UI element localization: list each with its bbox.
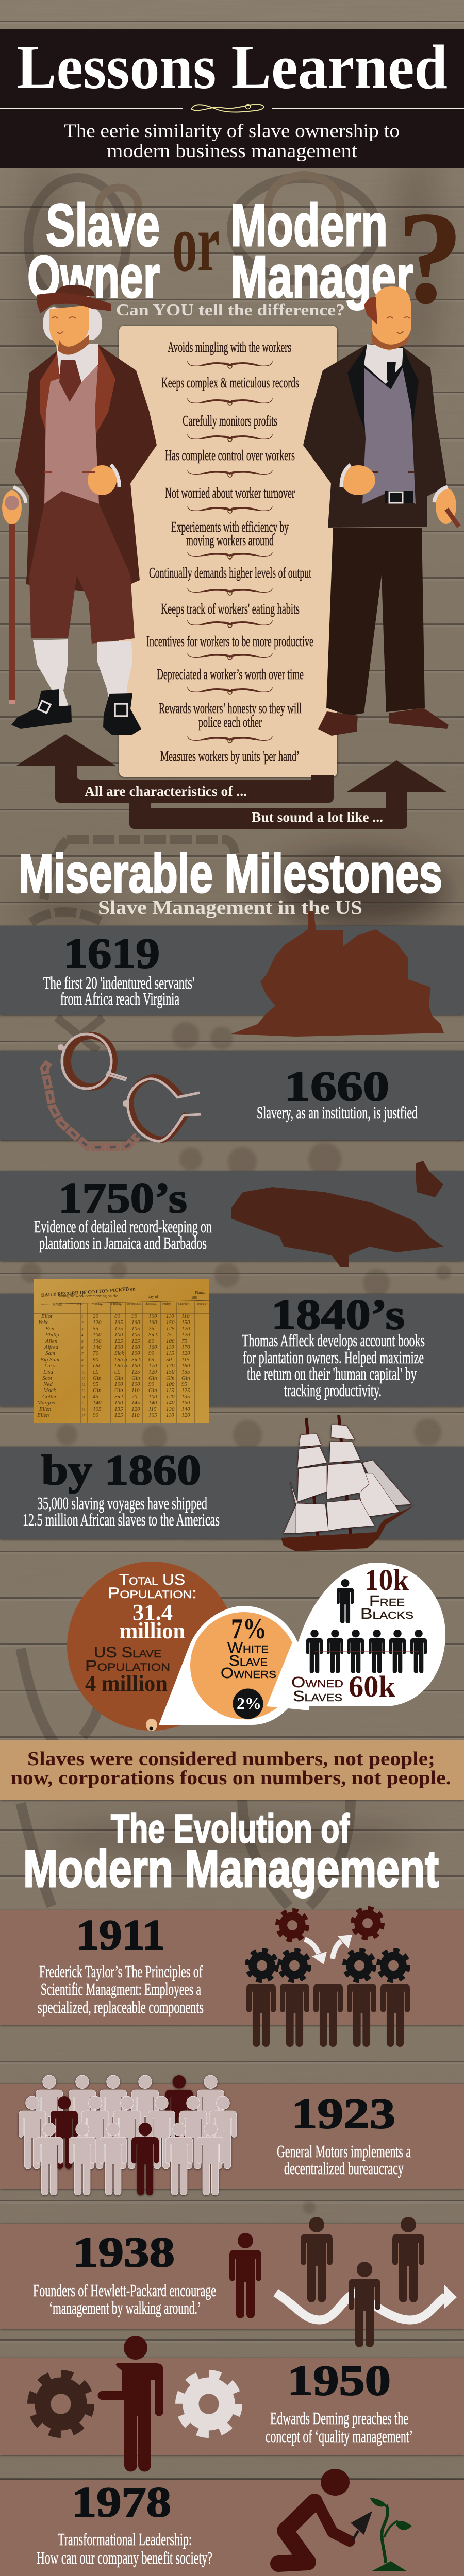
ledger photo: 115	[148, 1406, 157, 1412]
ledger photo: 155	[181, 1369, 190, 1375]
ledger photo: Yoke	[38, 1319, 48, 1326]
milestone 1619	[0, 911, 464, 1037]
ledger photo: 125	[131, 1338, 140, 1344]
ledger photo: 110	[166, 1313, 174, 1319]
ledger photo: 100	[148, 1394, 157, 1400]
era 1911: specialized, replaceable components	[38, 1998, 204, 2017]
ledger photo: 160	[131, 1344, 140, 1350]
ledger photo: 5	[81, 1340, 84, 1344]
ledger photo: NAME	[53, 1303, 62, 1307]
headline: slave owner or modern manager: Slave	[46, 192, 160, 259]
ledger photo: Allen	[45, 1338, 58, 1344]
ledger photo: 6	[81, 1346, 84, 1350]
milestone 1750s: Evidence of detailed record-keeping on	[34, 1217, 212, 1236]
ledger photo: 10	[81, 1370, 86, 1375]
era 1938: Founders of Hewlett-Packard encourage	[33, 2281, 216, 2300]
ledger photo: 50	[166, 1357, 172, 1363]
arrow: but sound a lot like	[129, 760, 446, 829]
ledger photo: Eliot	[41, 1313, 53, 1319]
ledger photo: 110	[181, 1313, 190, 1319]
trousers	[326, 528, 425, 716]
ledger photo: Gin	[114, 1387, 123, 1394]
ledger photo: 135	[114, 1406, 123, 1412]
population statistics bubbles: Owners	[221, 1665, 276, 1682]
ledger photo: 150	[166, 1369, 175, 1375]
trait list: Rewards workers’ honesty so they will	[159, 700, 302, 717]
divider with flourish	[0, 104, 464, 112]
ledger photo: 100	[166, 1338, 175, 1344]
icon: ship	[281, 1415, 415, 1551]
ledger photo: 115	[181, 1357, 190, 1363]
ledger photo: 150	[166, 1319, 175, 1326]
ledger photo: 90	[148, 1381, 155, 1387]
ledger photo: 95	[181, 1381, 188, 1387]
milestone by 1860: 35,000 slaving voyages have shipped	[37, 1494, 207, 1513]
icon: dark gear	[32, 2376, 89, 2432]
era 1978: 1978	[72, 2478, 171, 2526]
ledger photo	[34, 1279, 209, 1423]
population statistics bubbles: Population:	[108, 1585, 197, 1602]
ledger photo: 180	[181, 1363, 190, 1369]
ledger photo: 100	[131, 1350, 140, 1357]
arrow: but sound a lot like: But sound a lot like ...	[252, 809, 383, 825]
arrow: all are characteristics of	[16, 734, 334, 803]
breeches	[29, 491, 135, 644]
era 1978: Transformational Leadership:	[58, 2530, 192, 2549]
milestone 1619: from Africa reach Virginia	[60, 990, 179, 1009]
population statistics bubbles: 2%	[237, 1694, 261, 1713]
ledger photo: Friday.	[162, 1303, 171, 1306]
ledger photo: 150	[181, 1319, 190, 1326]
ledger photo: 160	[148, 1344, 157, 1350]
milestone 1750s: 1750’s	[58, 1174, 187, 1222]
hands	[367, 471, 378, 473]
milestone 1619: The first 20 'indentured servants'	[43, 974, 194, 993]
ledger photo: Gin	[131, 1375, 140, 1381]
population statistics bubbles: 7%	[231, 1613, 267, 1645]
ledger photo: 20	[93, 1313, 99, 1319]
headline: slave owner or modern manager: Modern	[230, 192, 388, 259]
heading: miserable milestones: Slave Management in the US	[98, 897, 362, 919]
ledger photo: cL	[93, 1369, 98, 1375]
arrow: all are characteristics of: All are characteristics of ...	[85, 784, 247, 799]
population statistics bubbles: Blacks	[360, 1606, 413, 1622]
ledger photo: 110	[131, 1387, 140, 1394]
ledger photo: Ellen	[37, 1412, 49, 1418]
milestone by 1860: by 1860	[41, 1446, 201, 1494]
milestone 1840s: tracking productivity.	[284, 1381, 382, 1400]
ledger photo: 105	[131, 1326, 140, 1332]
ledger photo: Ben	[45, 1326, 55, 1332]
callout: numbers not people: Slaves were considered numbers, not people;	[27, 1748, 435, 1770]
ledger photo: 120	[131, 1406, 140, 1412]
population statistics bubbles: White	[227, 1640, 269, 1656]
era 1911: Scientific Managment: Employees a	[41, 1980, 201, 1999]
population statistics bubbles: US Slave	[94, 1644, 161, 1661]
population statistics bubbles: 10k	[364, 1563, 409, 1597]
callout: numbers not people	[0, 1740, 464, 1800]
ledger photo: 185	[191, 1295, 197, 1300]
ledger photo: 120	[181, 1350, 190, 1357]
hat	[55, 285, 95, 296]
ledger photo: 70	[131, 1394, 137, 1400]
ledger photo: 115	[166, 1350, 174, 1357]
map: Virginia	[231, 911, 444, 1037]
trait list: Depreciated a worker’s worth over time	[157, 666, 304, 683]
ledger photo: Monday.	[92, 1303, 103, 1306]
era 1923: decentralized bureaucracy	[284, 2159, 404, 2178]
milestone 1619: 1619	[63, 929, 160, 977]
ledger photo: 1	[81, 1315, 84, 1319]
ledger photo: 8	[81, 1358, 84, 1362]
ledger photo: Philip	[45, 1332, 59, 1338]
ledger photo: 105	[148, 1412, 157, 1418]
ledger photo: 120	[181, 1326, 190, 1332]
era 1950	[0, 2336, 464, 2472]
ledger photo: Big Sam	[40, 1357, 59, 1363]
era 1978	[0, 2469, 464, 2576]
ledger photo: 115	[166, 1387, 174, 1394]
ledger photo: 110	[131, 1412, 140, 1418]
milestone 1660: 1660	[284, 1062, 389, 1110]
population statistics bubbles: 4 million	[85, 1671, 168, 1696]
population statistics bubbles: Population	[85, 1657, 170, 1674]
population statistics bubbles: Free	[369, 1593, 405, 1609]
trait list: Carefully monitors profits	[183, 413, 277, 429]
ledger photo: 160	[148, 1319, 157, 1326]
ledger photo: Gin	[114, 1375, 123, 1381]
hands and cane	[88, 465, 117, 495]
ledger photo: Lucy	[44, 1363, 56, 1369]
ledger photo: 70	[93, 1350, 99, 1357]
ledger photo: Ellen	[39, 1406, 52, 1412]
era 1923: 1923	[291, 2090, 395, 2137]
ledger photo: 120	[181, 1332, 190, 1338]
milestone 1750s: plantations in Jamaica and Barbados	[39, 1234, 207, 1253]
shoes	[11, 689, 72, 729]
ledger photo: Sick	[114, 1350, 124, 1357]
ledger photo: 75	[181, 1338, 188, 1344]
ledger photo: 125	[114, 1412, 123, 1418]
ledger photo: Gin	[166, 1375, 175, 1381]
population statistics bubbles: Slaves	[293, 1688, 342, 1705]
circle: total US population	[67, 1562, 236, 1731]
ledger photo: 145	[131, 1400, 140, 1406]
icon: workers with swappable gears	[246, 1909, 410, 2047]
milestone 1840s	[0, 1279, 464, 1423]
ledger photo: Plantat	[195, 1290, 206, 1295]
ledger photo: 125	[166, 1326, 175, 1332]
headline: slave owner or modern manager: Owner	[27, 243, 160, 310]
trait list: Has complete control over workers	[165, 447, 295, 464]
ledger photo: Scot	[42, 1375, 53, 1381]
population statistics bubbles: 60k	[349, 1670, 396, 1703]
circle: two percent	[233, 1688, 263, 1719]
ledger photo: 125	[114, 1326, 123, 1332]
ledger photo: 75	[148, 1326, 155, 1332]
icon: light gear	[180, 2376, 237, 2432]
ledger photo: 14	[81, 1395, 86, 1399]
icons: owned slaves row	[306, 1630, 427, 1673]
ledger photo: Alfred	[44, 1344, 59, 1350]
title: Lessons Learned	[16, 32, 448, 102]
shoes	[318, 711, 358, 736]
ledger photo: Gin	[181, 1375, 190, 1381]
era 1978: How can our company benefit society?	[37, 2549, 212, 2568]
ledger photo: 90	[93, 1412, 99, 1418]
ledger photo: Sick	[131, 1357, 141, 1363]
dot: small share	[146, 1719, 157, 1731]
era 1938: ‘management by walking around.’	[49, 2299, 201, 2318]
ledger photo: Gin	[148, 1387, 157, 1394]
population statistics bubbles: Owned	[291, 1674, 343, 1691]
ledger photo: Gin	[148, 1375, 157, 1381]
trait list: Incentives for workers to be more productive	[146, 633, 313, 650]
icon: quality manager figure	[98, 2336, 163, 2472]
ledger photo: 45	[93, 1394, 99, 1400]
ledger photo: 135	[181, 1394, 190, 1400]
header banner: modern business management	[107, 141, 358, 162]
ledger photo: Thursday.	[144, 1303, 157, 1306]
era 1911: 1911	[76, 1911, 165, 1958]
milestone by 1860	[0, 1415, 464, 1551]
icon: manager walking among workers	[229, 2217, 457, 2347]
ledger photo: 140	[93, 1344, 102, 1350]
ledger photo: 120	[148, 1369, 157, 1375]
milestone by 1860: 12.5 million African slaves to the Americas	[23, 1511, 220, 1530]
ledger photo: 90	[93, 1357, 99, 1363]
ledger photo: Gin	[93, 1387, 102, 1394]
ledger photo: 160	[114, 1400, 123, 1406]
population statistics bubbles: million	[120, 1618, 185, 1643]
population statistics bubbles: 31.4	[132, 1600, 173, 1625]
ledger photo: 100	[114, 1332, 123, 1338]
ledger photo: Ditch	[114, 1357, 127, 1363]
ledger photo: Tuesday.	[111, 1303, 122, 1306]
ledger photo: 100	[166, 1381, 175, 1387]
trait list: moving workers around	[186, 532, 274, 549]
ledger photo: 130	[166, 1406, 175, 1412]
ledger photo: 100	[114, 1381, 123, 1387]
ledger photo: No.	[77, 1303, 82, 1306]
ledger photo: 13	[81, 1389, 86, 1393]
ledger photo: 120	[166, 1394, 175, 1400]
ledger photo: 9	[81, 1364, 84, 1368]
map: Jamaica	[231, 1187, 444, 1267]
headline: slave owner or modern manager: ?	[397, 184, 463, 331]
ledger photo: 125	[181, 1387, 190, 1394]
trait list: Measures workers by units 'per hand’	[160, 748, 300, 765]
icon: kneeling gardener	[278, 2469, 372, 2564]
ledger photo: 165	[114, 1319, 123, 1326]
ledger photo: 160	[181, 1400, 190, 1406]
ledger photo: 100	[93, 1332, 102, 1338]
ledger photo: 170	[181, 1344, 190, 1350]
ledger photo: 65	[148, 1357, 155, 1363]
ledger photo: Cotter	[42, 1394, 57, 1400]
hair and head	[43, 307, 64, 340]
ledger photo: 105	[131, 1332, 140, 1338]
ledger photo: 80	[114, 1313, 121, 1319]
circle: white slave owners	[190, 1612, 297, 1719]
era 1938	[0, 2217, 464, 2347]
ledger photo: 100	[114, 1344, 123, 1350]
headline: slave owner or modern manager	[27, 184, 463, 331]
ledger photo: 55	[93, 1326, 99, 1332]
coat	[15, 344, 157, 592]
ledger photo: Week's P.	[197, 1303, 209, 1306]
trait list: police each other	[198, 714, 262, 731]
bubble: white callouts	[159, 1563, 445, 1725]
ledger photo: 160	[131, 1319, 140, 1326]
ledger photo: DAILY RECORD OF COTTON PICKED on	[41, 1286, 136, 1298]
ledger photo: 100	[131, 1381, 140, 1387]
ledger photo: 11	[81, 1377, 85, 1381]
callout: numbers not people: now, corporations focus on numbers, not people.	[11, 1767, 451, 1789]
trait list: Continually demands higher levels of output	[149, 565, 311, 581]
ledger photo: 160	[131, 1363, 140, 1369]
ledger photo: 16	[81, 1408, 86, 1412]
headline: slave owner or modern manager: Can YOU tell the difference?	[116, 300, 345, 319]
ledger photo: 170	[166, 1363, 175, 1369]
ledger photo: 12	[81, 1383, 86, 1387]
icon: free person	[337, 1579, 354, 1623]
ledger photo: Sam	[45, 1350, 55, 1357]
wood stains	[21, 1022, 451, 2576]
population statistics bubbles: Total US	[119, 1571, 185, 1588]
ledger photo: 2	[81, 1321, 84, 1325]
ledger photo: 90	[148, 1350, 155, 1357]
subtitle: The eerie similarity of slave ownership to	[64, 121, 400, 142]
ledger photo: 140	[181, 1406, 190, 1412]
headline: slave owner or modern manager: or	[172, 197, 220, 289]
trait list: Experiements with efficiency by	[171, 519, 289, 535]
ledger photo: 120	[181, 1412, 190, 1418]
milestone 1840s: 1840’s	[271, 1291, 405, 1338]
era 1950: 1950	[287, 2357, 391, 2404]
trait list: Not worried about worker turnover	[165, 485, 295, 501]
ledger photo: Sick	[114, 1394, 124, 1400]
era 1938: 1938	[73, 2228, 175, 2276]
ledger photo: Sick	[148, 1332, 158, 1338]
ledger photo: Lisa	[43, 1369, 53, 1375]
trait list: Keeps complex & meticulous records	[161, 375, 299, 391]
era 1911	[0, 1909, 464, 2047]
figure: modern manager	[303, 286, 459, 736]
ledger photo: Saturday.	[178, 1303, 190, 1306]
ledger photo: 140	[166, 1400, 175, 1406]
ledger photo: 140	[93, 1400, 102, 1406]
ledger photo: 110	[166, 1344, 174, 1350]
header banner	[0, 29, 464, 168]
figure: slave owner	[2, 285, 157, 735]
era 1923	[0, 2075, 464, 2195]
heading: evolution of modern management: The Evolution of	[111, 1806, 350, 1851]
head	[364, 344, 403, 384]
ledger photo: 80	[148, 1338, 155, 1344]
era 1911: Frederick Taylor’s The Principles of	[39, 1962, 203, 1981]
ledger photo: Gin	[93, 1375, 102, 1381]
trait list: Avoids mingling with the workers	[168, 339, 291, 355]
icon: seedling	[370, 2498, 412, 2571]
ledger photo: Ned	[43, 1381, 53, 1387]
milestone 1750s	[0, 1161, 464, 1267]
ledger photo: 100	[148, 1313, 157, 1319]
ledger photo: 3	[81, 1327, 84, 1331]
ledger photo: 100	[93, 1338, 102, 1344]
ledger photo: cL	[114, 1369, 120, 1375]
ledger photo: 15	[81, 1401, 86, 1405]
ledger photo: during the week commencing on the	[58, 1294, 118, 1298]
ledger photo: Mock	[43, 1387, 57, 1394]
ledger photo: 17	[81, 1414, 86, 1418]
ledger photo: 120	[93, 1319, 102, 1326]
ledger photo: 75	[166, 1332, 172, 1338]
ledger photo: 4	[81, 1333, 84, 1337]
ledger photo: 140	[148, 1400, 157, 1406]
ledger photo: Margret	[37, 1400, 56, 1406]
milestone 1660	[0, 1034, 464, 1147]
ledger photo: 170	[148, 1363, 157, 1369]
icon: crowd of workers	[19, 2075, 237, 2195]
icon: shackles	[44, 1034, 201, 1147]
population statistics bubbles	[67, 1562, 445, 1731]
ledger photo: 125	[114, 1338, 123, 1344]
ledger photo: 90	[131, 1313, 137, 1319]
trait list	[146, 339, 313, 765]
ledger photo: Dit	[92, 1363, 101, 1369]
map: Barbados	[416, 1161, 443, 1197]
ledger photo: 7	[81, 1352, 84, 1356]
ledger photo: day of	[148, 1294, 159, 1299]
trait list: Keeps track of workers' eating habits	[161, 601, 300, 617]
ledger photo: Ditch	[114, 1363, 127, 1369]
heading: evolution of modern management	[23, 1806, 439, 1898]
ledger photo: 105	[93, 1406, 102, 1412]
ledger photo: Wednesday.	[127, 1303, 142, 1306]
ledger photo: 95	[93, 1381, 99, 1387]
ledger photo: 110	[166, 1412, 174, 1418]
comparison panel	[119, 326, 337, 777]
population statistics bubbles: Slave	[229, 1653, 268, 1669]
ledger photo: 125	[131, 1369, 140, 1375]
